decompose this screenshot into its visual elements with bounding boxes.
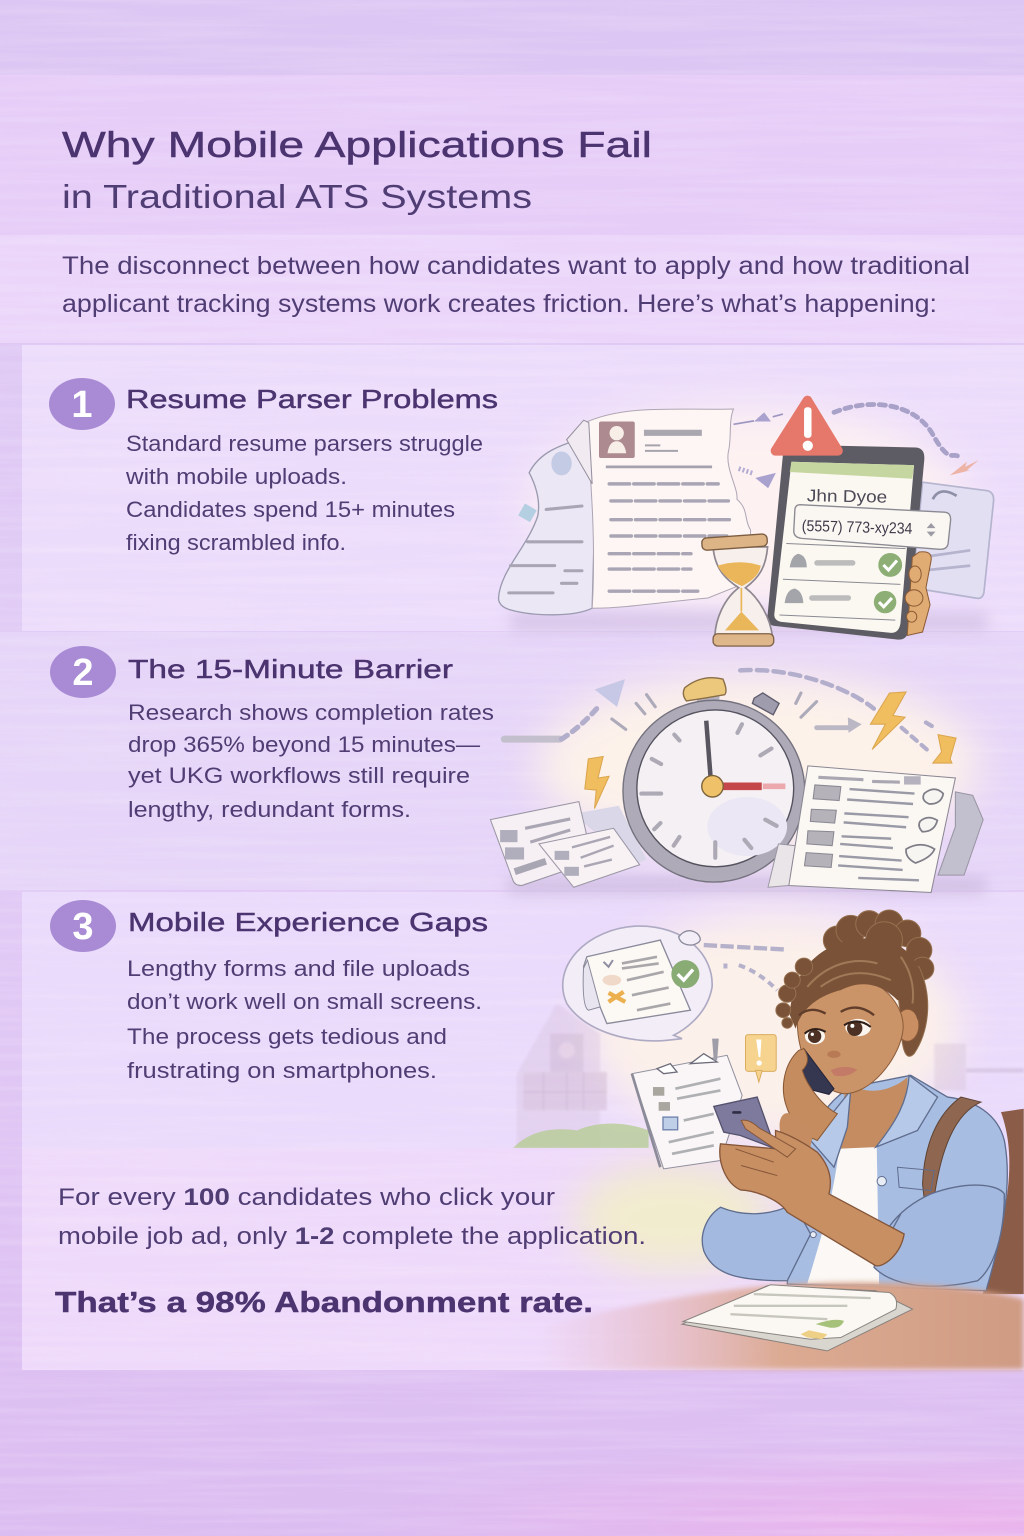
intro text: The disconnect between how candidates want to apply and how traditional [62,252,970,280]
jacket body [787,1075,1007,1291]
faded building [517,1004,1024,1147]
back resume page [499,436,596,615]
body 2 [128,700,494,822]
number badge 3: 3 [72,906,94,948]
illustration: stressed candidate on the phone [513,910,1024,1369]
backpack strap [923,1097,981,1199]
holding arm and lower hand [720,1130,904,1266]
intro text [62,252,970,318]
open book [682,1285,912,1351]
body 2: drop 365% beyond 15 minutes— [128,732,480,757]
title: Why Mobile Applications Fail [62,124,652,165]
title [62,124,652,215]
body 3: don’t work well on small screens. [127,989,482,1014]
jacket buttons and pocket [810,1167,934,1238]
number badge 2 [50,646,116,698]
number badge 2: 2 [72,652,94,694]
form field [794,505,951,549]
smartphone [714,1097,776,1149]
panel: mobile experience gaps [50,900,488,1083]
statistic text: For every 100 candidates who click your [58,1184,555,1211]
alert note [745,1035,776,1082]
number badge 1 [49,378,115,430]
body 1 [125,431,483,555]
check marks [874,553,902,613]
form field: (5557) 773-xy234 [802,518,913,538]
hair front [776,938,922,1029]
body 2: lengthy, redundant forms. [128,797,411,822]
phone: Jhn Dyoe [807,486,887,507]
foliage [513,1124,649,1148]
neck [834,1077,907,1149]
white shirt [807,1145,879,1284]
body 1: with mobile uploads. [125,464,347,489]
right background card [912,482,994,598]
eyes and brows [799,1008,874,1076]
panel: resume parser problems [49,378,994,646]
panel: the 15-minute barrier [50,646,987,894]
notepad [632,1039,742,1169]
stopwatch [623,678,805,882]
body 3: frustrating on smartphones. [127,1058,437,1083]
body 3 [127,956,482,1083]
statistic text [58,1184,646,1250]
front resume page [567,409,751,608]
number badge 1: 1 [71,384,93,426]
warning triangle [775,400,838,451]
thought bubble [563,926,784,1041]
body 1: Standard resume parsers struggle [126,431,483,456]
right forms [768,766,983,892]
left sleeve [702,1204,811,1281]
illustration: stopwatch and forms [490,670,987,894]
heading 3: Mobile Experience Gaps [128,907,488,937]
resume avatar [599,422,635,458]
dashed arc [834,404,958,457]
body 3: The process gets tedious and [127,1024,447,1049]
statistic text: mobile job ad, only 1-2 complete the application. [58,1223,646,1250]
chair [983,1109,1024,1294]
body 1: Candidates spend 15+ minutes [126,497,455,522]
heading 1: Resume Parser Problems [126,384,498,414]
ear [896,1009,919,1041]
number badge 3 [50,900,116,952]
body 1: fixing scrambled info. [126,530,346,555]
illustration: resume, hourglass and phone [499,400,994,646]
right sleeve [874,1185,1004,1286]
hand [905,552,931,635]
title: in Traditional ATS Systems [62,178,532,215]
person [702,910,1007,1291]
left forms [490,802,647,887]
table [540,1282,1024,1369]
hourglass [702,534,774,646]
fingers [735,1120,796,1176]
body 2: Research shows completion rates [128,700,494,725]
panel: abandonment statistic [55,1184,646,1319]
ear phone and hand [780,1049,837,1161]
abandonment headline: That’s a 98% Abandonment rate. [55,1287,593,1319]
body 3: Lengthy forms and file uploads [127,956,470,981]
heading 2: The 15-Minute Barrier [128,654,453,684]
body 2: yet UKG workflows still require [128,763,470,788]
dashed paths and arrows [504,670,935,750]
lightning bolts [585,692,956,809]
collar [811,1075,938,1167]
bun and hair back [823,910,934,1056]
intro text: applicant tracking systems work creates friction. Here’s what’s happening: [62,290,937,318]
phone [767,445,924,640]
face [797,973,903,1094]
